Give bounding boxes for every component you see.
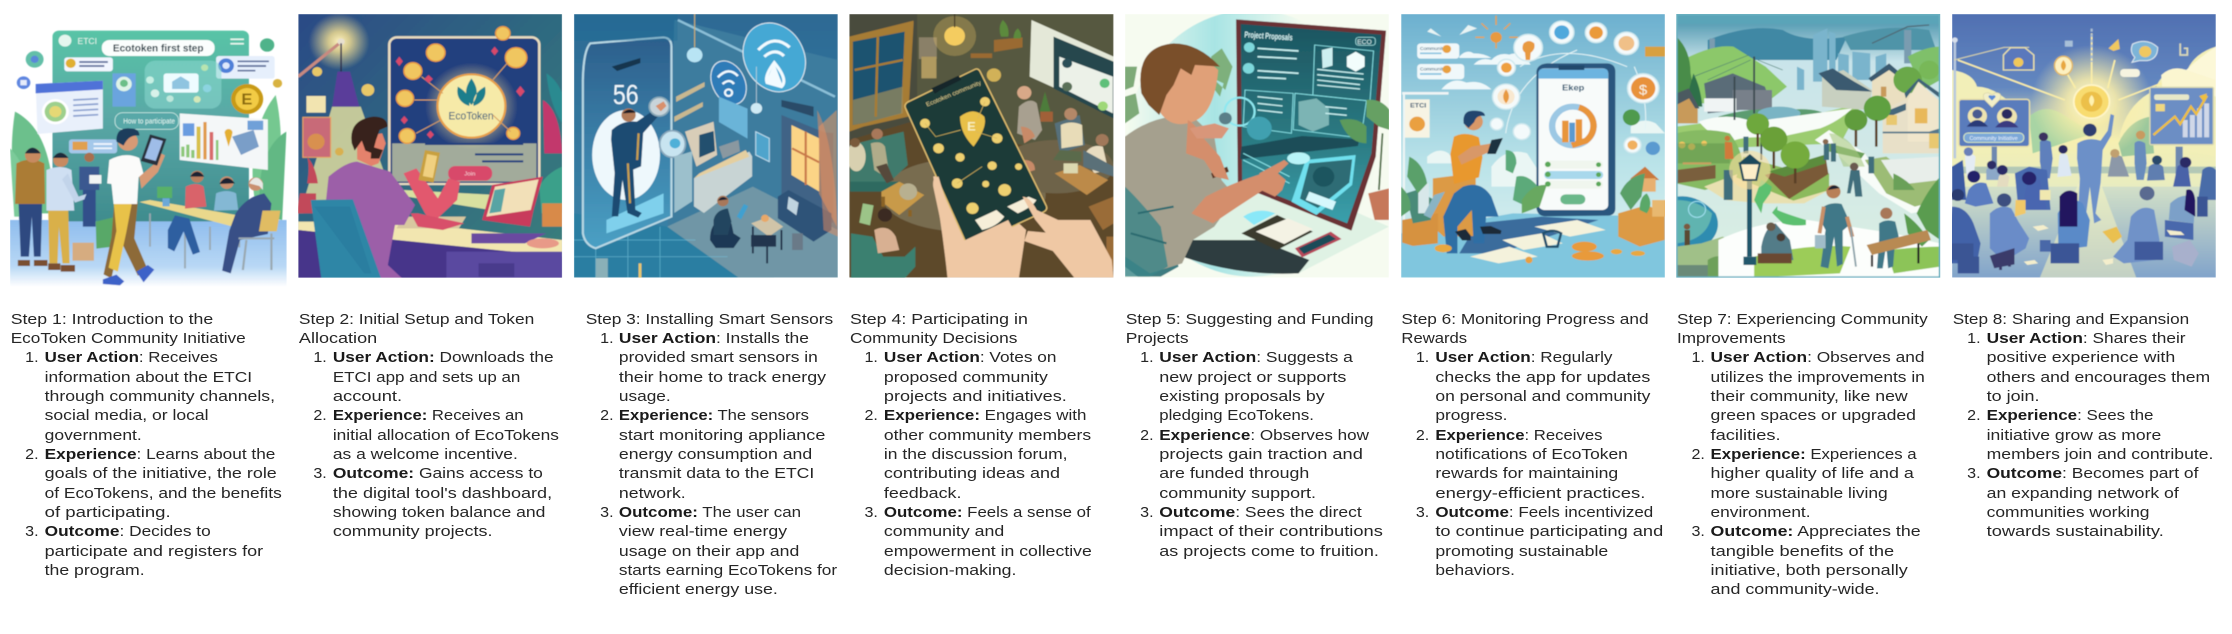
- step 3 text: Step 3: Installing Smart Sensors: [586, 311, 833, 328]
- step 7 text: 1.: [1691, 349, 1705, 366]
- step 2 text: Allocation: [299, 330, 377, 347]
- step 5 text: Step 5: Suggesting and Funding: [1126, 311, 1374, 328]
- step 4 text: projects and initiatives.: [884, 388, 1067, 405]
- step 4 text: decision-making.: [884, 562, 1016, 579]
- step 3 text: usage.: [619, 388, 671, 405]
- step 4 text: other community members: [884, 427, 1091, 444]
- step 2 text: Step 2: Initial Setup and Token: [299, 311, 534, 328]
- step 2 text: User Action: Downloads the: [333, 349, 554, 366]
- illustration: person reviewing project proposals on a tablet: Project Proposals: [1244, 30, 1293, 42]
- step 8 text: 1.: [1967, 330, 1981, 347]
- step 3 text: 1.: [600, 330, 614, 347]
- illustration: person monitoring rewards on a giant phone: Community: [1420, 67, 1446, 73]
- panel: step 1: [10, 31, 287, 579]
- step 7 text: Outcome: Appreciates the: [1711, 523, 1921, 540]
- step 8 text: positive experience with: [1987, 349, 2175, 366]
- step 5 text: 1.: [1140, 349, 1154, 366]
- step 6 text: promoting sustainable: [1435, 543, 1608, 560]
- illustration: user setting up the EcoToken app at a desk: EcoToken: [449, 110, 494, 122]
- step 1 text: EcoToken Community Initiative: [11, 330, 246, 347]
- step 5 text: Experience: Observes how: [1159, 427, 1370, 444]
- step 7 text: initiative, both personally: [1711, 562, 1908, 579]
- step 8 text: to join.: [1987, 388, 2039, 405]
- step 2 text: as a welcome incentive.: [333, 446, 518, 463]
- step 3 text: transmit data to the ETCI: [619, 465, 814, 482]
- illustration: installing smart sensors with phone and isometric home: [574, 14, 838, 280]
- step 1 text: 1.: [25, 349, 39, 366]
- step 6 text: 1.: [1416, 349, 1429, 366]
- illustration: community introduction with ETCI board and people: ETCI: [77, 36, 97, 46]
- step 4 text: community and: [884, 523, 1004, 540]
- step 4 text: contributing ideas and: [884, 465, 1060, 482]
- step 7 text: and community-wide.: [1711, 581, 1879, 598]
- step 6 text: checks the app for updates: [1435, 369, 1651, 386]
- step 2 text: initial allocation of EcoTokens: [333, 427, 559, 444]
- illustration: voting on a phone in a community living room: Ecotoken community: [925, 79, 983, 108]
- step 6 text: User Action: Regularly: [1435, 349, 1613, 366]
- panel: step 7: [1676, 14, 1943, 598]
- step 5 text: Projects: [1126, 330, 1189, 347]
- step 6 text: 2.: [1416, 427, 1429, 444]
- step 1 text: participate and registers for: [45, 543, 263, 560]
- step 4 text: Community Decisions: [850, 330, 1018, 347]
- step 6 text: behaviors.: [1435, 562, 1515, 579]
- step 4 text: feedback.: [884, 485, 961, 502]
- step 4 text: 3.: [864, 504, 878, 521]
- illustration: community introduction with ETCI board and people: E: [241, 92, 252, 109]
- illustration: community introduction with ETCI board and people: Ecotoken first step: [113, 44, 204, 55]
- step 7 text: higher quality of life and a: [1711, 465, 1914, 482]
- step 6 text: 3.: [1416, 504, 1429, 521]
- step 2 text: 3.: [313, 465, 327, 482]
- step 8 text: 3.: [1967, 465, 1981, 482]
- step 1 text: information about the ETCI: [45, 369, 252, 386]
- illustration: voting on a phone in a community living room: E: [967, 120, 976, 134]
- panel: step 5: [1125, 10, 1390, 560]
- step 8 text: Outcome: Becomes part of: [1987, 465, 2199, 482]
- illustration: presenter sharing the initiative with a seated crowd: Community Initiative: [1969, 136, 2018, 142]
- step 5 text: [1126, 311, 1383, 560]
- illustration: person monitoring rewards on a giant phone: Community: [1420, 46, 1446, 52]
- step 5 text: Outcome: Sees the direct: [1159, 504, 1363, 521]
- illustration: person monitoring rewards on a giant phone: ETCI: [1410, 103, 1426, 109]
- panel: step 2: [296, 13, 562, 540]
- step 8 text: an expanding network of: [1987, 485, 2180, 502]
- illustration: user setting up the EcoToken app at a desk: Join: [464, 171, 475, 177]
- step 2 text: the digital tool's dashboard,: [333, 485, 552, 502]
- step 1 text: 3.: [25, 523, 39, 540]
- illustration: person reviewing project proposals on a tablet: [1125, 10, 1390, 278]
- step 1 text: User Action: Receives: [45, 349, 218, 366]
- step 7 text: Step 7: Experiencing Community: [1677, 311, 1928, 328]
- step 1 text: through community channels,: [45, 388, 275, 405]
- step 6 text: Outcome: Feels incentivized: [1435, 504, 1653, 521]
- step 3 text: network.: [619, 485, 686, 502]
- step 6 text: progress.: [1435, 407, 1507, 424]
- illustration: community introduction with ETCI board and people: How to participate: [123, 117, 175, 126]
- step 7 text: utilizes the improvements in: [1711, 369, 1925, 386]
- step 3 text: provided smart sensors in: [619, 349, 818, 366]
- step 2 text: Experience: Receives an: [333, 407, 524, 424]
- step 8 text: User Action: Shares their: [1987, 330, 2186, 347]
- step 6 text: [1401, 311, 1663, 579]
- step 7 text: User Action: Observes and: [1711, 349, 1924, 366]
- step 8 text: initiative grow as more: [1987, 427, 2161, 444]
- step 3 text: User Action: Installs the: [619, 330, 809, 347]
- step 2 text: ETCI app and sets up an: [333, 369, 520, 386]
- panel: step 3: [574, 14, 838, 598]
- step 7 text: 2.: [1691, 446, 1705, 463]
- step 3 text: view real-time energy: [619, 523, 787, 540]
- step 1 text: 2.: [25, 446, 39, 463]
- step 4 text: in the discussion forum,: [884, 446, 1067, 463]
- step 5 text: 3.: [1140, 504, 1154, 521]
- step 3 text: [586, 311, 837, 598]
- step 3 text: Outcome: The user can: [619, 504, 801, 521]
- illustration: voting on a phone in a community living room: [847, 14, 1114, 278]
- step 1 text: the program.: [45, 562, 145, 579]
- step 5 text: pledging EcoTokens.: [1159, 407, 1314, 424]
- illustration: installing smart sensors with phone and isometric home: 56: [613, 80, 639, 111]
- illustration: user setting up the EcoToken app at a desk: [296, 13, 562, 280]
- step 6 text: Step 6: Monitoring Progress and: [1401, 311, 1649, 328]
- step 2 text: 2.: [313, 407, 327, 424]
- step 5 text: impact of their contributions: [1159, 523, 1383, 540]
- step 6 text: Experience: Receives: [1435, 427, 1603, 444]
- step 5 text: 2.: [1140, 427, 1154, 444]
- step 4 text: proposed community: [884, 369, 1048, 386]
- step 4 text: 2.: [864, 407, 878, 424]
- step 2 text: showing token balance and: [333, 504, 545, 521]
- step 3 text: their home to track energy: [619, 369, 826, 386]
- illustration: presenter sharing the initiative with a seated crowd: [1948, 14, 2216, 278]
- step 4 text: Experience: Engages with: [884, 407, 1086, 424]
- step 3 text: start monitoring appliance: [619, 427, 825, 444]
- illustration: community introduction with ETCI board and people: [10, 31, 287, 287]
- step 3 text: 3.: [600, 504, 614, 521]
- step 6 text: notifications of EcoToken: [1435, 446, 1628, 463]
- step 5 text: new project or supports: [1159, 369, 1347, 386]
- step 3 text: Experience: The sensors: [619, 407, 809, 424]
- step 4 text: User Action: Votes on: [884, 349, 1056, 366]
- step 1 text: [11, 311, 282, 579]
- step 1 text: of participating.: [45, 504, 171, 521]
- step 1 text: social media, or local: [45, 407, 209, 424]
- step 6 text: rewards for maintaining: [1435, 465, 1618, 482]
- panel: step 6: [1401, 14, 1666, 579]
- step 6 text: energy-efficient practices.: [1435, 485, 1645, 502]
- step 7 text: more sustainable living: [1711, 485, 1888, 502]
- step 1 text: Step 1: Introduction to the: [11, 311, 213, 328]
- step 4 text: 1.: [864, 349, 878, 366]
- step 1 text: Outcome: Decides to: [45, 523, 211, 540]
- step 8 text: towards sustainability.: [1987, 523, 2164, 540]
- illustration: person monitoring rewards on a giant phone: Ekep: [1562, 83, 1585, 93]
- step 4 text: Step 4: Participating in: [850, 311, 1028, 328]
- step 7 text: green spaces or upgraded: [1711, 407, 1916, 424]
- step 1 text: of EcoTokens, and the benefits: [45, 485, 282, 502]
- step 2 text: community projects.: [333, 523, 492, 540]
- step 4 text: Outcome: Feels a sense of: [884, 504, 1091, 521]
- step 7 text: tangible benefits of the: [1711, 543, 1894, 560]
- step 3 text: efficient energy use.: [619, 581, 778, 598]
- step 7 text: their community, like new: [1711, 388, 1909, 405]
- step 1 text: Experience: Learns about the: [45, 446, 275, 463]
- step 8 text: members join and contribute.: [1987, 446, 2213, 463]
- step 4 text: empowerment in collective: [884, 543, 1092, 560]
- panel: step 4: [847, 14, 1114, 579]
- step 8 text: others and encourages them: [1987, 369, 2210, 386]
- step 7 text: facilities.: [1711, 427, 1781, 444]
- step 2 text: account.: [333, 388, 402, 405]
- step 5 text: are funded through: [1159, 465, 1309, 482]
- step 3 text: starts earning EcoTokens for: [619, 562, 837, 579]
- illustration: person monitoring rewards on a giant phone: $: [1639, 83, 1647, 99]
- step 3 text: 2.: [600, 407, 614, 424]
- step 1 text: goals of the initiative, the role: [45, 465, 277, 482]
- illustration: person reviewing project proposals on a tablet: ECO: [1357, 39, 1372, 46]
- step 6 text: Rewards: [1401, 330, 1467, 347]
- step 6 text: to continue participating and: [1435, 523, 1663, 540]
- step 3 text: usage on their app and: [619, 543, 799, 560]
- step 2 text: [299, 311, 559, 540]
- step 2 text: 1.: [313, 349, 327, 366]
- illustration: person monitoring rewards on a giant phone: [1401, 14, 1666, 278]
- illustration: improved green neighbourhood with paths and houses: [1676, 14, 1943, 278]
- step 4 text: [850, 311, 1092, 579]
- step 5 text: as projects come to fruition.: [1159, 543, 1379, 560]
- step 3 text: energy consumption and: [619, 446, 812, 463]
- step 2 text: Outcome: Gains access to: [333, 465, 543, 482]
- step 7 text: Experience: Experiences a: [1711, 446, 1917, 463]
- step 5 text: community support.: [1159, 485, 1316, 502]
- step 5 text: existing proposals by: [1159, 388, 1325, 405]
- step 1 text: government.: [45, 427, 142, 444]
- step 7 text: [1677, 311, 1928, 598]
- step 7 text: 3.: [1691, 523, 1705, 540]
- step 5 text: projects gain traction and: [1159, 446, 1363, 463]
- step 8 text: [1953, 311, 2213, 540]
- step 8 text: 2.: [1967, 407, 1981, 424]
- step 7 text: Improvements: [1677, 330, 1786, 347]
- step 7 text: environment.: [1711, 504, 1811, 521]
- step 8 text: Experience: Sees the: [1987, 407, 2153, 424]
- step 5 text: User Action: Suggests a: [1159, 349, 1353, 366]
- step 8 text: Step 8: Sharing and Expansion: [1953, 311, 2189, 328]
- step 8 text: communities working: [1987, 504, 2149, 521]
- step 6 text: on personal and community: [1435, 388, 1651, 405]
- panel: step 8: [1948, 14, 2216, 540]
